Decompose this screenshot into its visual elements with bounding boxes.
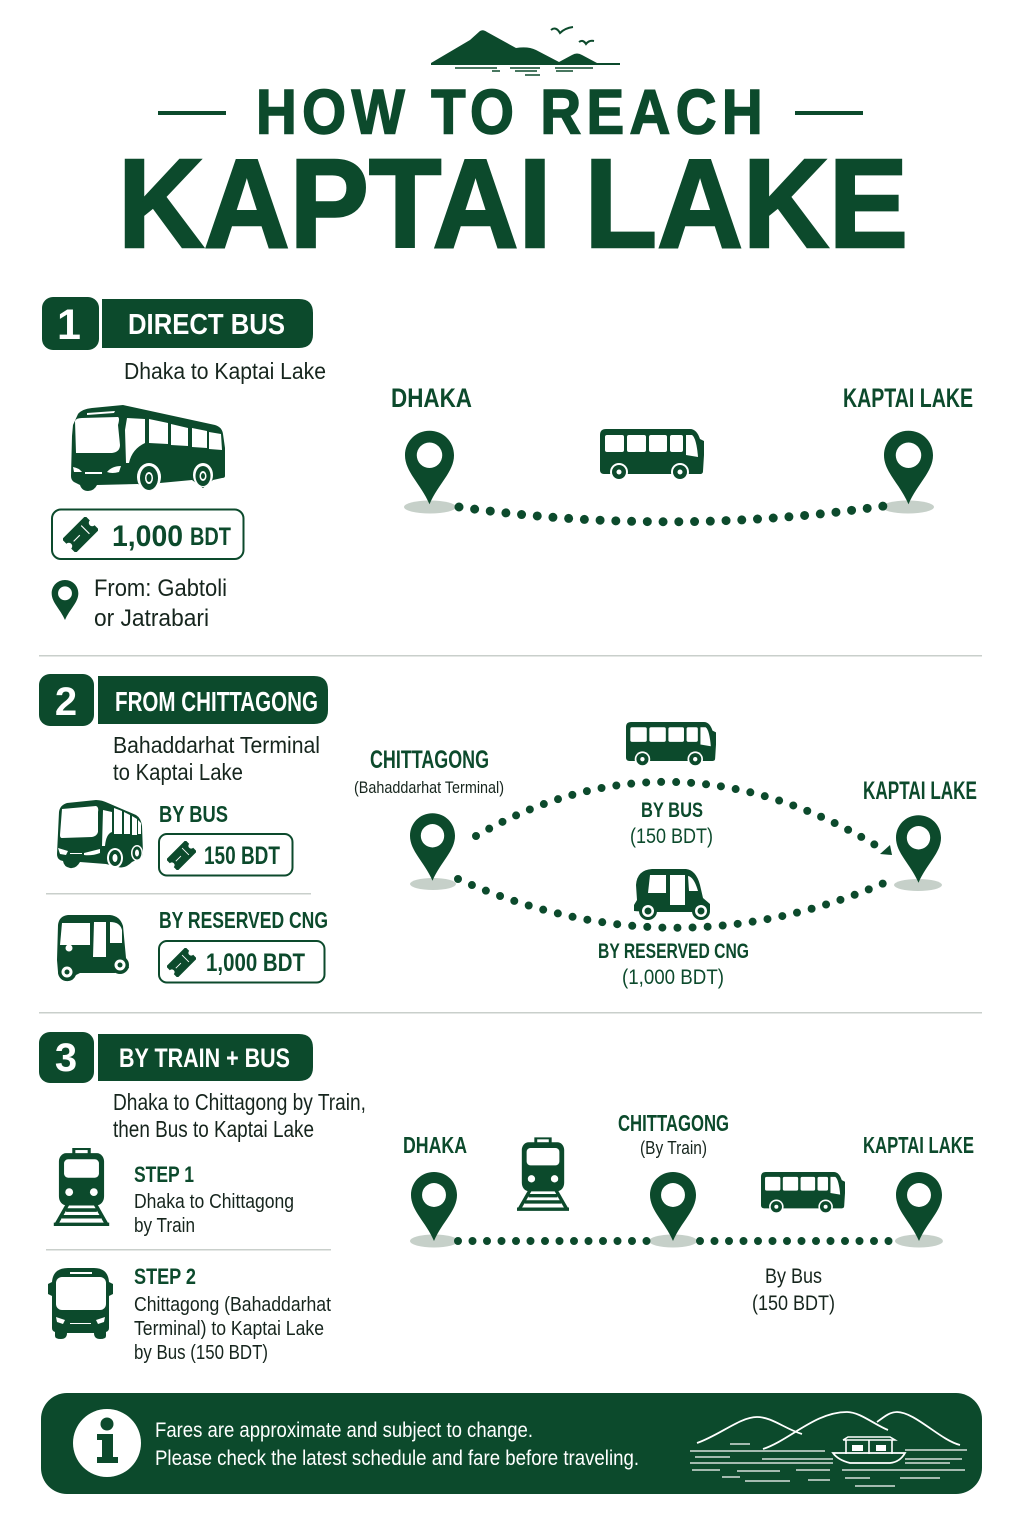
route map: Chittagong to Kaptai Lake: BY RESERVED CNG — [598, 940, 749, 963]
route map: Dhaka to Chittagong to Kaptai Lake: (By Train) — [640, 1138, 707, 1158]
option: by reserved CNG fare: BY RESERVED CNG — [159, 907, 328, 933]
footer notice banner — [41, 1393, 982, 1494]
notice text: Please check the latest schedule and fare before traveling. — [155, 1447, 639, 1470]
option: by bus fare: 150 BDT — [204, 842, 280, 870]
illustration: lake, hills and boat — [690, 1412, 967, 1486]
icon: coach bus — [71, 405, 225, 491]
icon: info — [73, 1409, 141, 1477]
notice text — [155, 1419, 639, 1470]
section 3 header: 3 — [55, 1036, 77, 1080]
step 1 text — [134, 1162, 294, 1237]
option: by bus fare: BY BUS — [159, 801, 228, 827]
section 1 subtitle: Dhaka to Kaptai Lake — [124, 358, 326, 384]
route map: Chittagong to Kaptai Lake — [354, 722, 977, 989]
departure point — [52, 575, 227, 632]
step 2 text: Terminal) to Kaptai Lake — [134, 1318, 324, 1340]
title block — [118, 27, 908, 274]
icon: mountain and lake — [431, 27, 620, 75]
route map: Chittagong to Kaptai Lake: (Bahaddarhat Terminal) — [354, 778, 504, 797]
step 2 text: by Bus (150 BDT) — [134, 1342, 268, 1364]
step 2 text — [134, 1264, 331, 1364]
heading line: HOW TO REACH — [256, 78, 768, 148]
route map: Dhaka to Kaptai Lake: KAPTAI LAKE — [843, 383, 973, 413]
step 2 text: STEP 2 — [134, 1264, 196, 1289]
route map: Chittagong to Kaptai Lake: (150 BDT) — [630, 825, 713, 848]
panel: section 3 train and bus — [39, 1032, 974, 1364]
icon: bus — [57, 800, 143, 868]
section 2 header: FROM CHITTAGONG — [115, 686, 318, 717]
section 2 subtitle — [113, 732, 320, 785]
panel: section 2 from Chittagong — [39, 674, 977, 989]
step 2 text: Chittagong (Bahaddarhat — [134, 1294, 331, 1316]
panel: section 1 direct bus — [42, 297, 973, 632]
route map: Dhaka to Chittagong to Kaptai Lake — [403, 1110, 974, 1315]
section 2 header: 2 — [55, 680, 77, 724]
route map: Chittagong to Kaptai Lake: CHITTAGONG — [370, 746, 489, 774]
route map: Dhaka to Kaptai Lake — [391, 383, 973, 522]
route map: Dhaka to Chittagong to Kaptai Lake: DHAKA — [403, 1132, 467, 1158]
route map: Dhaka to Kaptai Lake: DHAKA — [391, 383, 472, 413]
icon: CNG auto rickshaw — [57, 915, 129, 981]
section 2 header — [39, 674, 328, 726]
section 2 subtitle: to Kaptai Lake — [113, 759, 243, 785]
notice text: Fares are approximate and subject to change. — [155, 1419, 533, 1442]
option: by reserved CNG fare — [159, 907, 328, 982]
section 1 header — [42, 297, 313, 350]
departure point: or Jatrabari — [94, 605, 209, 632]
icon: bus front — [48, 1268, 113, 1339]
departure point: From: Gabtoli — [94, 575, 227, 602]
section 3 subtitle: Dhaka to Chittagong by Train, — [113, 1089, 366, 1115]
section 3 header: BY TRAIN + BUS — [119, 1043, 290, 1073]
section 3 header — [39, 1032, 313, 1083]
option: by reserved CNG fare: 1,000 BDT — [206, 949, 305, 977]
route map: Chittagong to Kaptai Lake: BY BUS — [641, 799, 703, 822]
section 1 header: 1 — [57, 301, 81, 349]
section 3 subtitle — [113, 1089, 366, 1142]
route map: Chittagong to Kaptai Lake: (1,000 BDT) — [622, 966, 724, 989]
icon: CNG side view — [634, 869, 710, 920]
section 3 subtitle: then Bus to Kaptai Lake — [113, 1116, 314, 1142]
section 1 header: DIRECT BUS — [128, 309, 285, 341]
fare box: 1,000 BDT: BDT — [190, 523, 231, 551]
route map: Dhaka to Chittagong to Kaptai Lake: By Bus — [765, 1265, 822, 1288]
route map: Dhaka to Chittagong to Kaptai Lake: KAPTAI LAKE — [863, 1132, 974, 1158]
route map: Dhaka to Chittagong to Kaptai Lake: (150 BDT) — [752, 1292, 835, 1315]
section 2 subtitle: Bahaddarhat Terminal — [113, 732, 320, 758]
main heading: KAPTAI LAKE — [118, 133, 908, 274]
step 1 text: Dhaka to Chittagong — [134, 1191, 294, 1213]
fare box: 1,000 BDT: 1,000 — [112, 520, 183, 553]
icon: train — [54, 1148, 109, 1225]
route map: Dhaka to Chittagong to Kaptai Lake: CHITTAGONG — [618, 1110, 729, 1136]
step 1 text: by Train — [134, 1215, 195, 1237]
option: by bus fare — [159, 801, 292, 876]
fare box: 1,000 BDT — [52, 510, 244, 559]
step 1 text: STEP 1 — [134, 1162, 194, 1187]
